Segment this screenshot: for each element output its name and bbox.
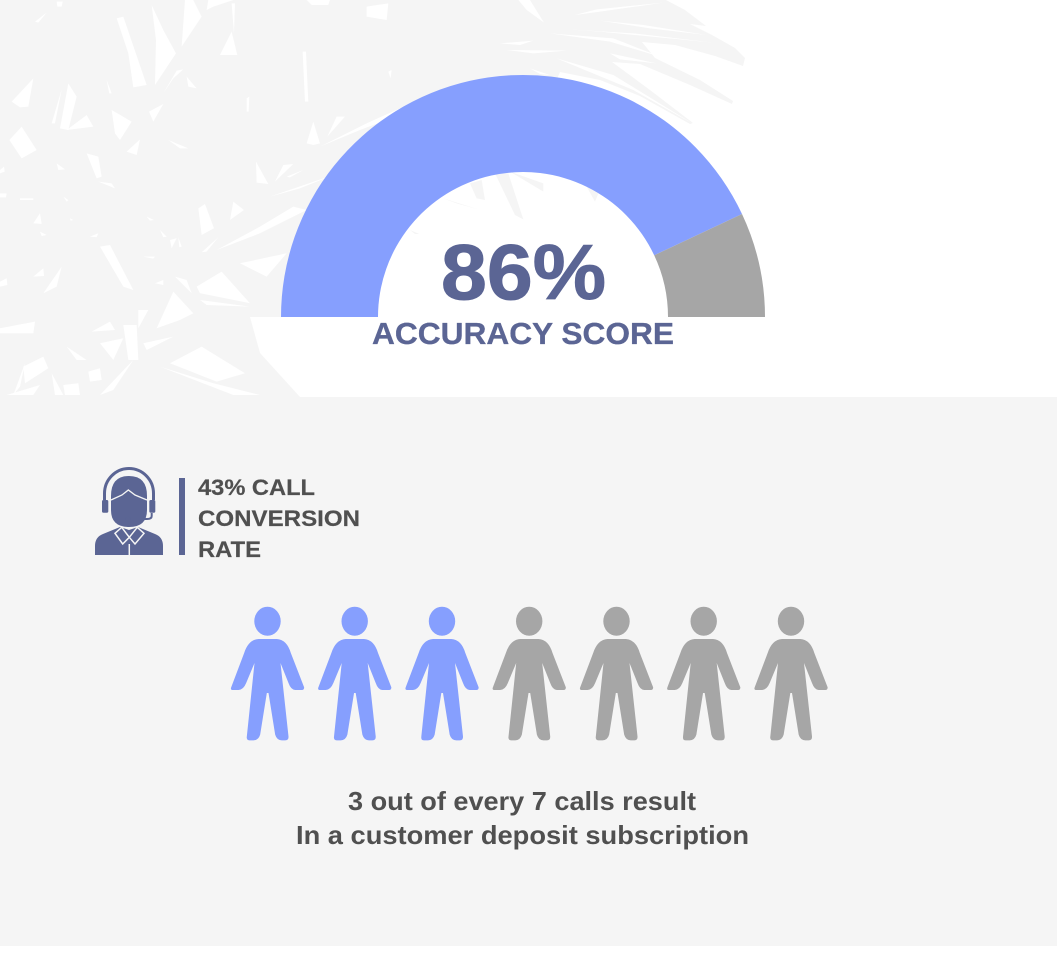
gauge inner disc xyxy=(378,172,668,317)
gauge chart xyxy=(281,75,765,317)
vertical divider bar xyxy=(179,478,185,555)
gauge label: ACCURACY SCORE xyxy=(372,316,674,351)
pictogram: 3 of 7 people xyxy=(231,607,828,740)
gauge segment: remainder xyxy=(654,214,765,317)
call conversion text: RATE xyxy=(198,537,261,562)
inner leaf strokes xyxy=(410,172,598,234)
icon: call agent with headset xyxy=(95,468,163,555)
background palm leaf xyxy=(0,0,745,397)
gauge segment: accuracy 86% xyxy=(281,75,742,317)
icon: non-converted callers xyxy=(493,607,828,740)
call conversion text: 43% CALL xyxy=(198,475,315,500)
call conversion text: CONVERSION xyxy=(198,506,360,531)
call conversion text xyxy=(198,475,360,562)
caption: 3 out of every 7 calls result xyxy=(348,786,696,816)
caption: In a customer deposit subscription xyxy=(296,820,749,850)
gauge value: 86% xyxy=(441,228,606,316)
panel: lower section background xyxy=(0,397,1057,946)
caption xyxy=(296,786,749,850)
icon: converted callers xyxy=(231,607,479,740)
